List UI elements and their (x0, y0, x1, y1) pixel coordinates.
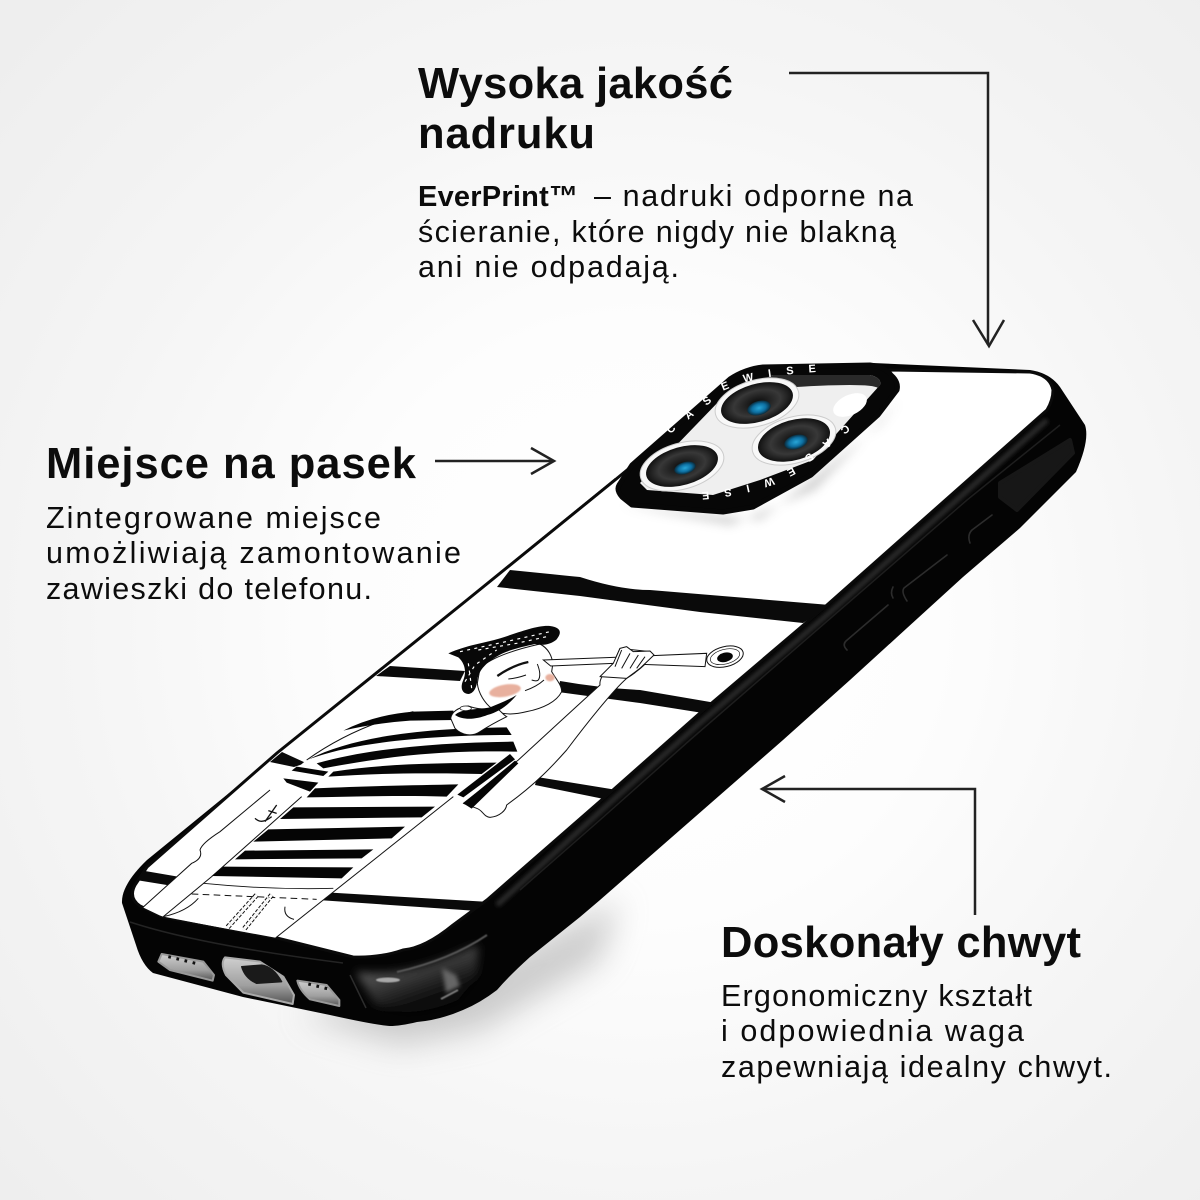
screen print area (132, 370, 1053, 957)
body text (721, 979, 1112, 1084)
arm and torso fill (143, 762, 332, 938)
callout: grip (721, 919, 1112, 1084)
mute switch (1000, 440, 1073, 510)
body text (418, 179, 913, 284)
phone shadow (300, 900, 620, 1045)
body text: EverPrint™ (418, 181, 578, 213)
body text: Zintegrowane miejsce (46, 501, 381, 535)
side rim lines (130, 420, 1060, 963)
hair (448, 626, 560, 694)
left speaker grille (158, 954, 214, 981)
phone case (122, 363, 1086, 1026)
window inner edge (723, 375, 880, 410)
body text: umożliwiają zamontowanie (46, 536, 461, 570)
body text: ścieranie, które nigdy nie blakną (418, 215, 896, 249)
body text: zapewniają idealny chwyt. (721, 1050, 1112, 1084)
shirt stripes (212, 711, 517, 878)
callout: strap slot (46, 440, 461, 606)
body text: i odpowiednia waga (721, 1014, 1024, 1048)
outlines and shorts (140, 712, 453, 938)
brand text bottom: CASEWISE (702, 426, 849, 500)
lens 1 (709, 369, 805, 437)
right speaker grille (297, 981, 339, 1006)
body text (46, 501, 461, 606)
heading: Wysoka jakość (418, 60, 733, 108)
bottom ports (158, 954, 339, 1006)
arrow: left callout (435, 448, 554, 474)
body text: zawieszki do telefonu. (46, 572, 372, 606)
hand (600, 647, 654, 678)
anchor tattoo (255, 805, 277, 822)
case body (122, 363, 1086, 1026)
flash (829, 388, 871, 422)
island shadow (620, 400, 900, 525)
lens 2 (746, 406, 842, 474)
neck band (455, 695, 517, 719)
body text: – nadruki odporne na (594, 179, 913, 213)
corner highlight (350, 935, 487, 1012)
figure: sailor body (140, 711, 517, 938)
arrow: top callout (789, 73, 1004, 346)
island frame (618, 365, 897, 512)
printed illustration (136, 570, 830, 938)
brand text top: CASEWISE (668, 364, 816, 432)
figure: head and raised arm (448, 626, 746, 817)
sleeve stripes (457, 754, 518, 809)
raised arm (463, 648, 653, 817)
body text: ani nie odpadają. (418, 250, 679, 284)
background stripes (136, 570, 830, 911)
telescope (542, 645, 744, 668)
charging port (223, 957, 294, 1004)
heading (418, 60, 733, 158)
hair dots (460, 632, 550, 688)
lens 3 (634, 432, 730, 500)
arrow: bottom callout (762, 776, 975, 915)
lens window (640, 375, 880, 495)
heading: nadruku (418, 110, 595, 158)
blush (488, 674, 555, 699)
heading: Doskonały chwyt (721, 919, 1081, 967)
collar (451, 706, 507, 735)
side buttons (844, 515, 992, 650)
camera island (616, 362, 900, 528)
body text: Ergonomiczny kształt (721, 979, 1033, 1013)
facial features (497, 662, 544, 691)
callout: print quality (418, 60, 913, 284)
face (477, 644, 562, 714)
heading: Miejsce na pasek (46, 440, 417, 488)
